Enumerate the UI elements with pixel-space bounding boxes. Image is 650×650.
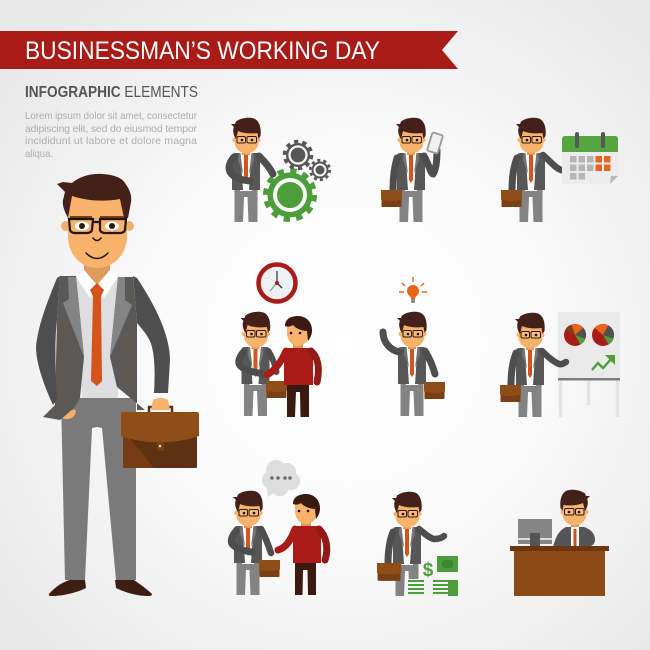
presentation board — [558, 312, 620, 417]
briefcase — [500, 385, 521, 402]
arms — [36, 276, 60, 405]
icon: phone — [427, 132, 443, 154]
icon: calendar — [562, 134, 618, 184]
icon: green gear — [266, 170, 314, 220]
scene: conversation — [231, 460, 327, 595]
scene: handshake and clock — [239, 264, 318, 417]
lapels — [63, 277, 132, 357]
scene: desk — [510, 490, 609, 596]
ears and face — [61, 221, 71, 231]
icon: light bulb — [399, 277, 427, 303]
businessman presenting — [511, 313, 566, 417]
businessman talking — [231, 491, 271, 595]
icon: grey gears — [284, 142, 330, 180]
intro text block — [25, 110, 198, 160]
trousers — [61, 398, 136, 580]
glasses and eyes — [69, 217, 126, 233]
businessman raising hand — [383, 312, 435, 416]
pie charts — [564, 324, 586, 346]
intro text block: Lorem ipsum dolor sit amet, consectetur — [25, 110, 197, 122]
intro text block: adipiscing elit, sed do eiusmod tempor — [25, 123, 198, 135]
businessman with calendar — [512, 118, 568, 222]
businessman with phone — [393, 118, 437, 222]
tie — [90, 283, 104, 386]
intro text block: incididunt ut labore et dolore magna — [25, 135, 197, 147]
intro text block: aliqua. — [25, 148, 53, 160]
briefcase — [377, 563, 401, 581]
scene: gears — [229, 118, 330, 222]
briefcase — [424, 382, 445, 399]
businessman at desk — [553, 490, 595, 547]
businessman with gears — [229, 118, 273, 222]
scene: phone — [381, 118, 443, 222]
icon: computer monitor — [518, 519, 552, 546]
title banner: BUSINESSMAN’S WORKING DAY — [25, 37, 380, 65]
colleague in red sweater — [267, 316, 318, 417]
title banner — [0, 31, 458, 69]
briefcase — [259, 560, 280, 577]
scene: idea — [383, 277, 445, 416]
colleague in red sweater — [278, 494, 327, 595]
shirt — [76, 270, 118, 398]
scene: money — [377, 492, 458, 596]
businessman shaking hands — [239, 312, 276, 416]
nose and smile — [86, 238, 108, 258]
briefcase — [121, 398, 199, 468]
growth arrow — [592, 355, 615, 370]
speech bubble — [262, 460, 300, 497]
icon: clock — [258, 264, 296, 302]
jacket body — [43, 276, 145, 420]
subtitle: INFOGRAPHIC ELEMENTS — [25, 84, 198, 101]
briefcase — [501, 190, 522, 207]
briefcase — [266, 381, 287, 398]
briefcase — [381, 190, 402, 207]
large businessman — [36, 174, 199, 596]
businessman with money — [388, 492, 444, 596]
money stacks: $ — [423, 560, 434, 581]
shoes — [49, 580, 152, 596]
hair — [57, 174, 131, 218]
scene: calendar — [501, 118, 618, 222]
desk — [510, 546, 609, 596]
scene: presentation — [500, 312, 620, 417]
hand in pocket — [62, 410, 76, 419]
neck — [84, 262, 110, 284]
